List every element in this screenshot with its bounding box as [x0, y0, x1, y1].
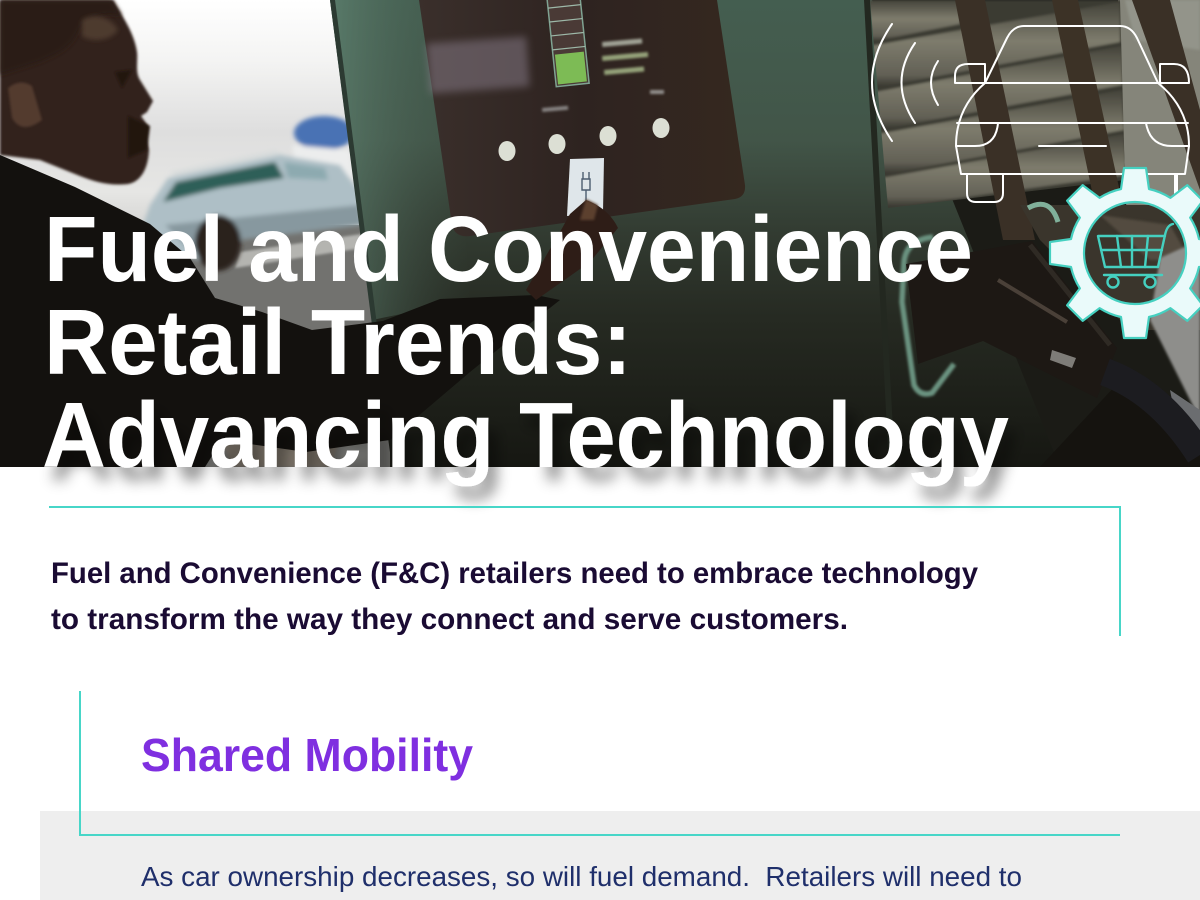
charger screen with battery gauge and buttons — [419, 0, 745, 236]
icon: gear with shopping cart — [1050, 168, 1200, 338]
heading: Shared Mobility: Shared Mobility — [141, 729, 473, 781]
ventilation louvers and posts — [870, 0, 1200, 240]
dark jacket and outstretched arm — [0, 155, 560, 467]
icon: connected car outline — [872, 24, 1189, 202]
man in profile — [0, 0, 618, 467]
title — [42, 197, 1009, 487]
battery gauge — [546, 0, 589, 87]
body text: As car ownership decreases, so will fuel demand. Retailers will need to — [141, 861, 1022, 892]
charging plug, socket and cable — [902, 204, 1200, 467]
round buttons — [498, 118, 670, 161]
intro text: Fuel and Convenience (F&C) retailers need to embrace technology — [51, 557, 978, 590]
blurred parked car — [142, 116, 362, 271]
plug button — [567, 158, 604, 216]
title: Advancing Technology — [42, 383, 1009, 487]
title: Fuel and Convenience — [44, 197, 973, 301]
hero photo: driver at EV charger — [0, 0, 1200, 467]
panel: shared mobility background — [40, 811, 1200, 900]
sky and forecourt backdrop — [0, 0, 1200, 467]
car body — [955, 26, 1189, 202]
green charger cabinet — [330, 0, 1060, 467]
title: Retail Trends: — [44, 290, 632, 394]
signal waves — [872, 24, 938, 141]
screen reflection — [426, 37, 530, 93]
intro text — [51, 557, 978, 636]
section frame line — [80, 691, 1120, 835]
shopping cart — [1098, 224, 1173, 288]
gear outline — [1050, 168, 1200, 338]
screen readouts — [542, 39, 664, 112]
intro text: to transform the way they connect and serve customers. — [51, 603, 848, 636]
intro frame line — [49, 507, 1120, 636]
